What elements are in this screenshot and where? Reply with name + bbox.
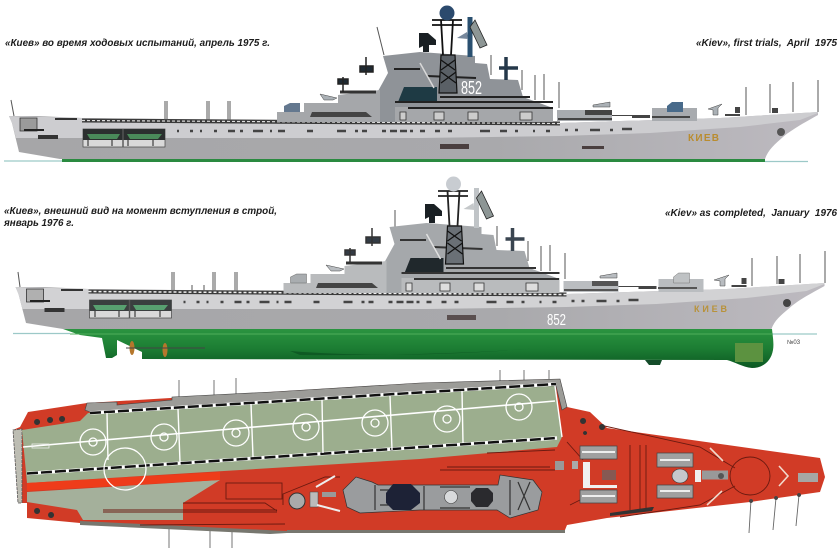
hull [16, 283, 824, 329]
aft director [345, 228, 380, 263]
green flight deck [22, 386, 562, 483]
bow grey block [798, 473, 818, 482]
boats in recesses [90, 300, 172, 318]
forward mast director [499, 57, 518, 80]
deck edge dashes [27, 384, 557, 474]
forward gun house block [557, 108, 697, 121]
masts [18, 210, 825, 291]
bow mast bases [749, 493, 801, 503]
anchor [777, 128, 785, 136]
lower green deck [27, 480, 220, 520]
propellers [126, 341, 205, 357]
aft gun on plan [289, 476, 340, 511]
hull upper light band [9, 112, 818, 138]
waterline [4, 160, 808, 162]
bow deck fittings [612, 107, 778, 118]
forward launchers group [555, 446, 617, 503]
dark radar director [419, 33, 436, 52]
island bands and windows [316, 234, 560, 291]
hull recess [447, 315, 476, 320]
hull recesses [440, 144, 604, 149]
boats in recesses [83, 129, 165, 147]
red deck markings [103, 425, 770, 525]
island superstructure [338, 52, 553, 122]
hull windows [184, 300, 638, 302]
bright red stripe [27, 472, 220, 491]
island superstructure [344, 223, 560, 293]
green underwater hull [63, 329, 773, 368]
hull upper light band [16, 283, 824, 309]
ship name on hull: КИЕВ [688, 133, 719, 144]
mid launchers group [657, 453, 693, 498]
radar mast [464, 188, 494, 228]
grey edge strip left [13, 429, 22, 503]
radar mast [457, 17, 487, 57]
caption: Russian second line: январь 1976 г. [3, 217, 74, 229]
forward gun turret [667, 102, 683, 112]
island detail lines [375, 480, 530, 515]
green boot-topping [62, 158, 765, 162]
bulb highlight [735, 343, 763, 362]
forward structure dark detail [558, 110, 690, 120]
flight deck edge rail [88, 292, 566, 294]
sphere radome on plan [444, 490, 458, 504]
lower deckhouses [277, 90, 553, 122]
missile launchers [326, 265, 729, 286]
ship name on hull: КИЕВ [694, 304, 728, 314]
grey edge strip top [85, 379, 567, 414]
forward mast director [506, 228, 524, 251]
black octagon funnel [386, 484, 420, 510]
hull deck outline [13, 379, 825, 533]
caption: Russian, first trials: «Киев» во время ходовых испытаний, апрель 1975 г. [5, 37, 270, 49]
ship plan view from above [13, 370, 825, 548]
lattice mast and sphere radome [432, 6, 462, 93]
hull [9, 112, 818, 159]
helipad cross lines [107, 386, 562, 462]
island superstructure plan [343, 475, 542, 518]
stern corner details [34, 416, 65, 518]
island bands and windows [310, 63, 553, 120]
forward gun on plan [672, 469, 728, 483]
dark forward director [471, 488, 493, 507]
helipad circles [80, 394, 532, 490]
forward gun turret [674, 273, 690, 283]
aft gun turret [290, 274, 306, 283]
lattice mast and sphere radome [438, 176, 468, 264]
flight deck edge rail [82, 120, 560, 124]
hull windows [177, 129, 632, 131]
stern mast and deck masts [11, 27, 818, 120]
side masts [169, 370, 799, 548]
grey edge strip bottom [80, 521, 565, 534]
aft gun turret [284, 103, 300, 112]
aft director [338, 57, 373, 92]
ship side view: as completed 1976 [13, 176, 825, 368]
hull number 852 on island: 852 [461, 78, 482, 98]
sonar bump [645, 360, 662, 365]
hull number 852 on hull: 852 [547, 312, 566, 329]
bow deck fittings [618, 278, 784, 289]
caption: Russian, as completed: «Киев», внешний вид на момент вступления в строй, [4, 205, 277, 217]
artist mark: №03 [787, 339, 801, 346]
deck centre line [23, 401, 555, 447]
missile launchers [320, 94, 722, 115]
ship side view: first trials 1975 [4, 6, 818, 162]
waterline [13, 332, 817, 335]
bilge keel [290, 347, 553, 355]
light green stripe [70, 333, 772, 335]
lower deckhouses [284, 261, 560, 293]
anchor [783, 299, 791, 307]
forward structures [564, 279, 704, 292]
stern details [20, 118, 77, 139]
forward structure dark detail [564, 281, 697, 291]
side fittings dark [580, 418, 654, 516]
white diagonal markers [707, 448, 788, 505]
deck slot marker [32, 444, 49, 448]
stern details [26, 289, 83, 312]
dark radar director [425, 204, 442, 223]
